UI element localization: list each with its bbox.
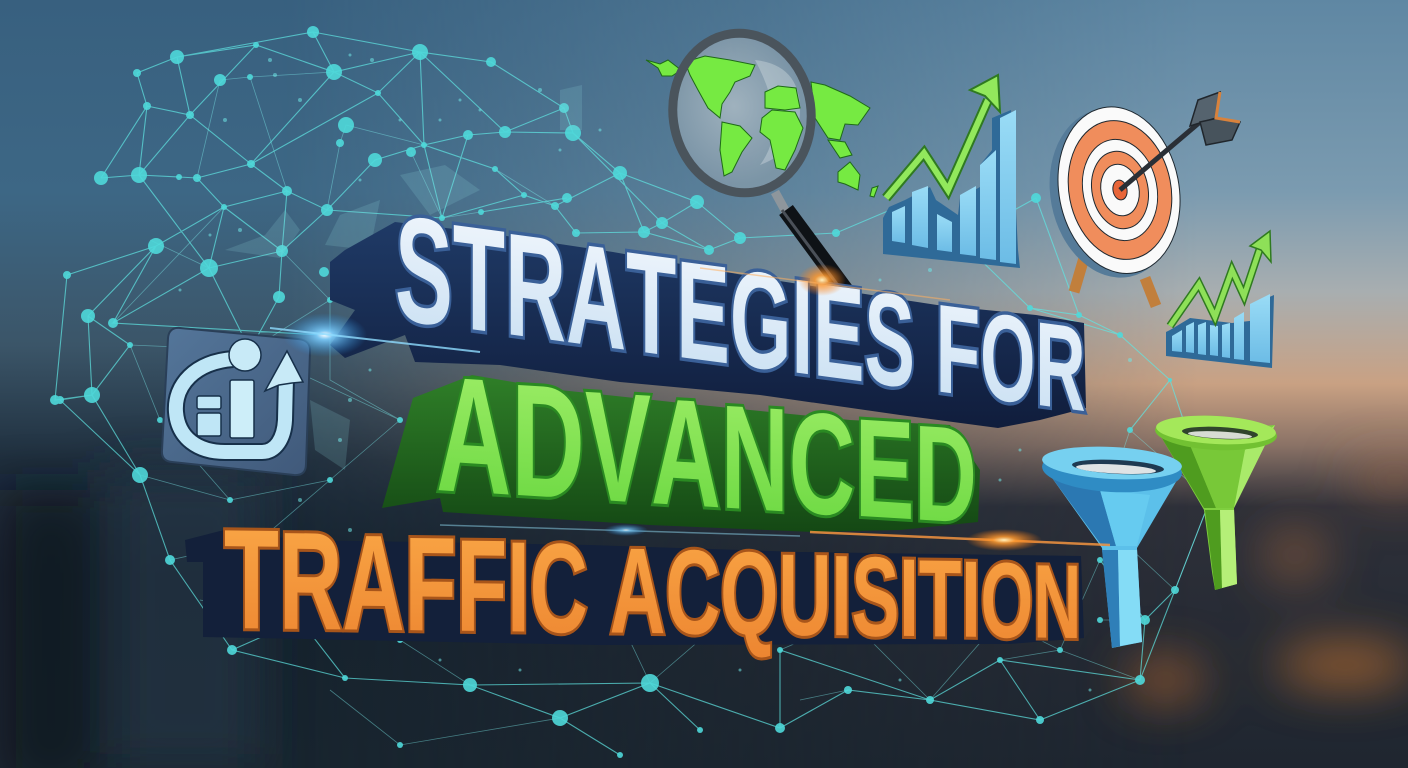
title line: STRATEGIES FOR: STRATEGIES FOR: [395, 185, 1085, 444]
title line: ADVANCED: ADVANCED: [436, 343, 977, 559]
light flares: [270, 264, 1110, 551]
icon: target with arrow on easel: [1035, 92, 1240, 306]
network mesh of connected nodes: [50, 26, 1213, 758]
icon: blue bar chart with green arrow: [883, 75, 1020, 268]
title: three-line 3D headline: [185, 185, 1086, 669]
icon: blue funnel: [1041, 443, 1183, 648]
title line: STRATEGIES FOR: STRATEGIES FOR: [395, 185, 1085, 444]
magnifier lens: [664, 26, 820, 200]
magnifier handle: [775, 192, 845, 290]
icon: magnifying glass over green world map: [646, 24, 878, 290]
icon: green funnel: [1154, 413, 1278, 590]
title line: TRAFFIC ACQUISITION: TRAFFIC ACQUISITION: [224, 500, 1081, 669]
target legs: [1074, 258, 1156, 306]
icon: rounded tile with bars and circular arrow: [162, 328, 310, 475]
target face: [1035, 96, 1195, 289]
world map continents: [646, 56, 878, 197]
icon: small bar chart with green arrow: [1166, 231, 1274, 368]
arrow in bullseye: [1120, 92, 1240, 190]
magnifier rim: [663, 24, 821, 202]
title line: ADVANCED: ADVANCED: [436, 343, 977, 559]
title line: TRAFFIC ACQUISITION: TRAFFIC ACQUISITION: [224, 500, 1081, 669]
